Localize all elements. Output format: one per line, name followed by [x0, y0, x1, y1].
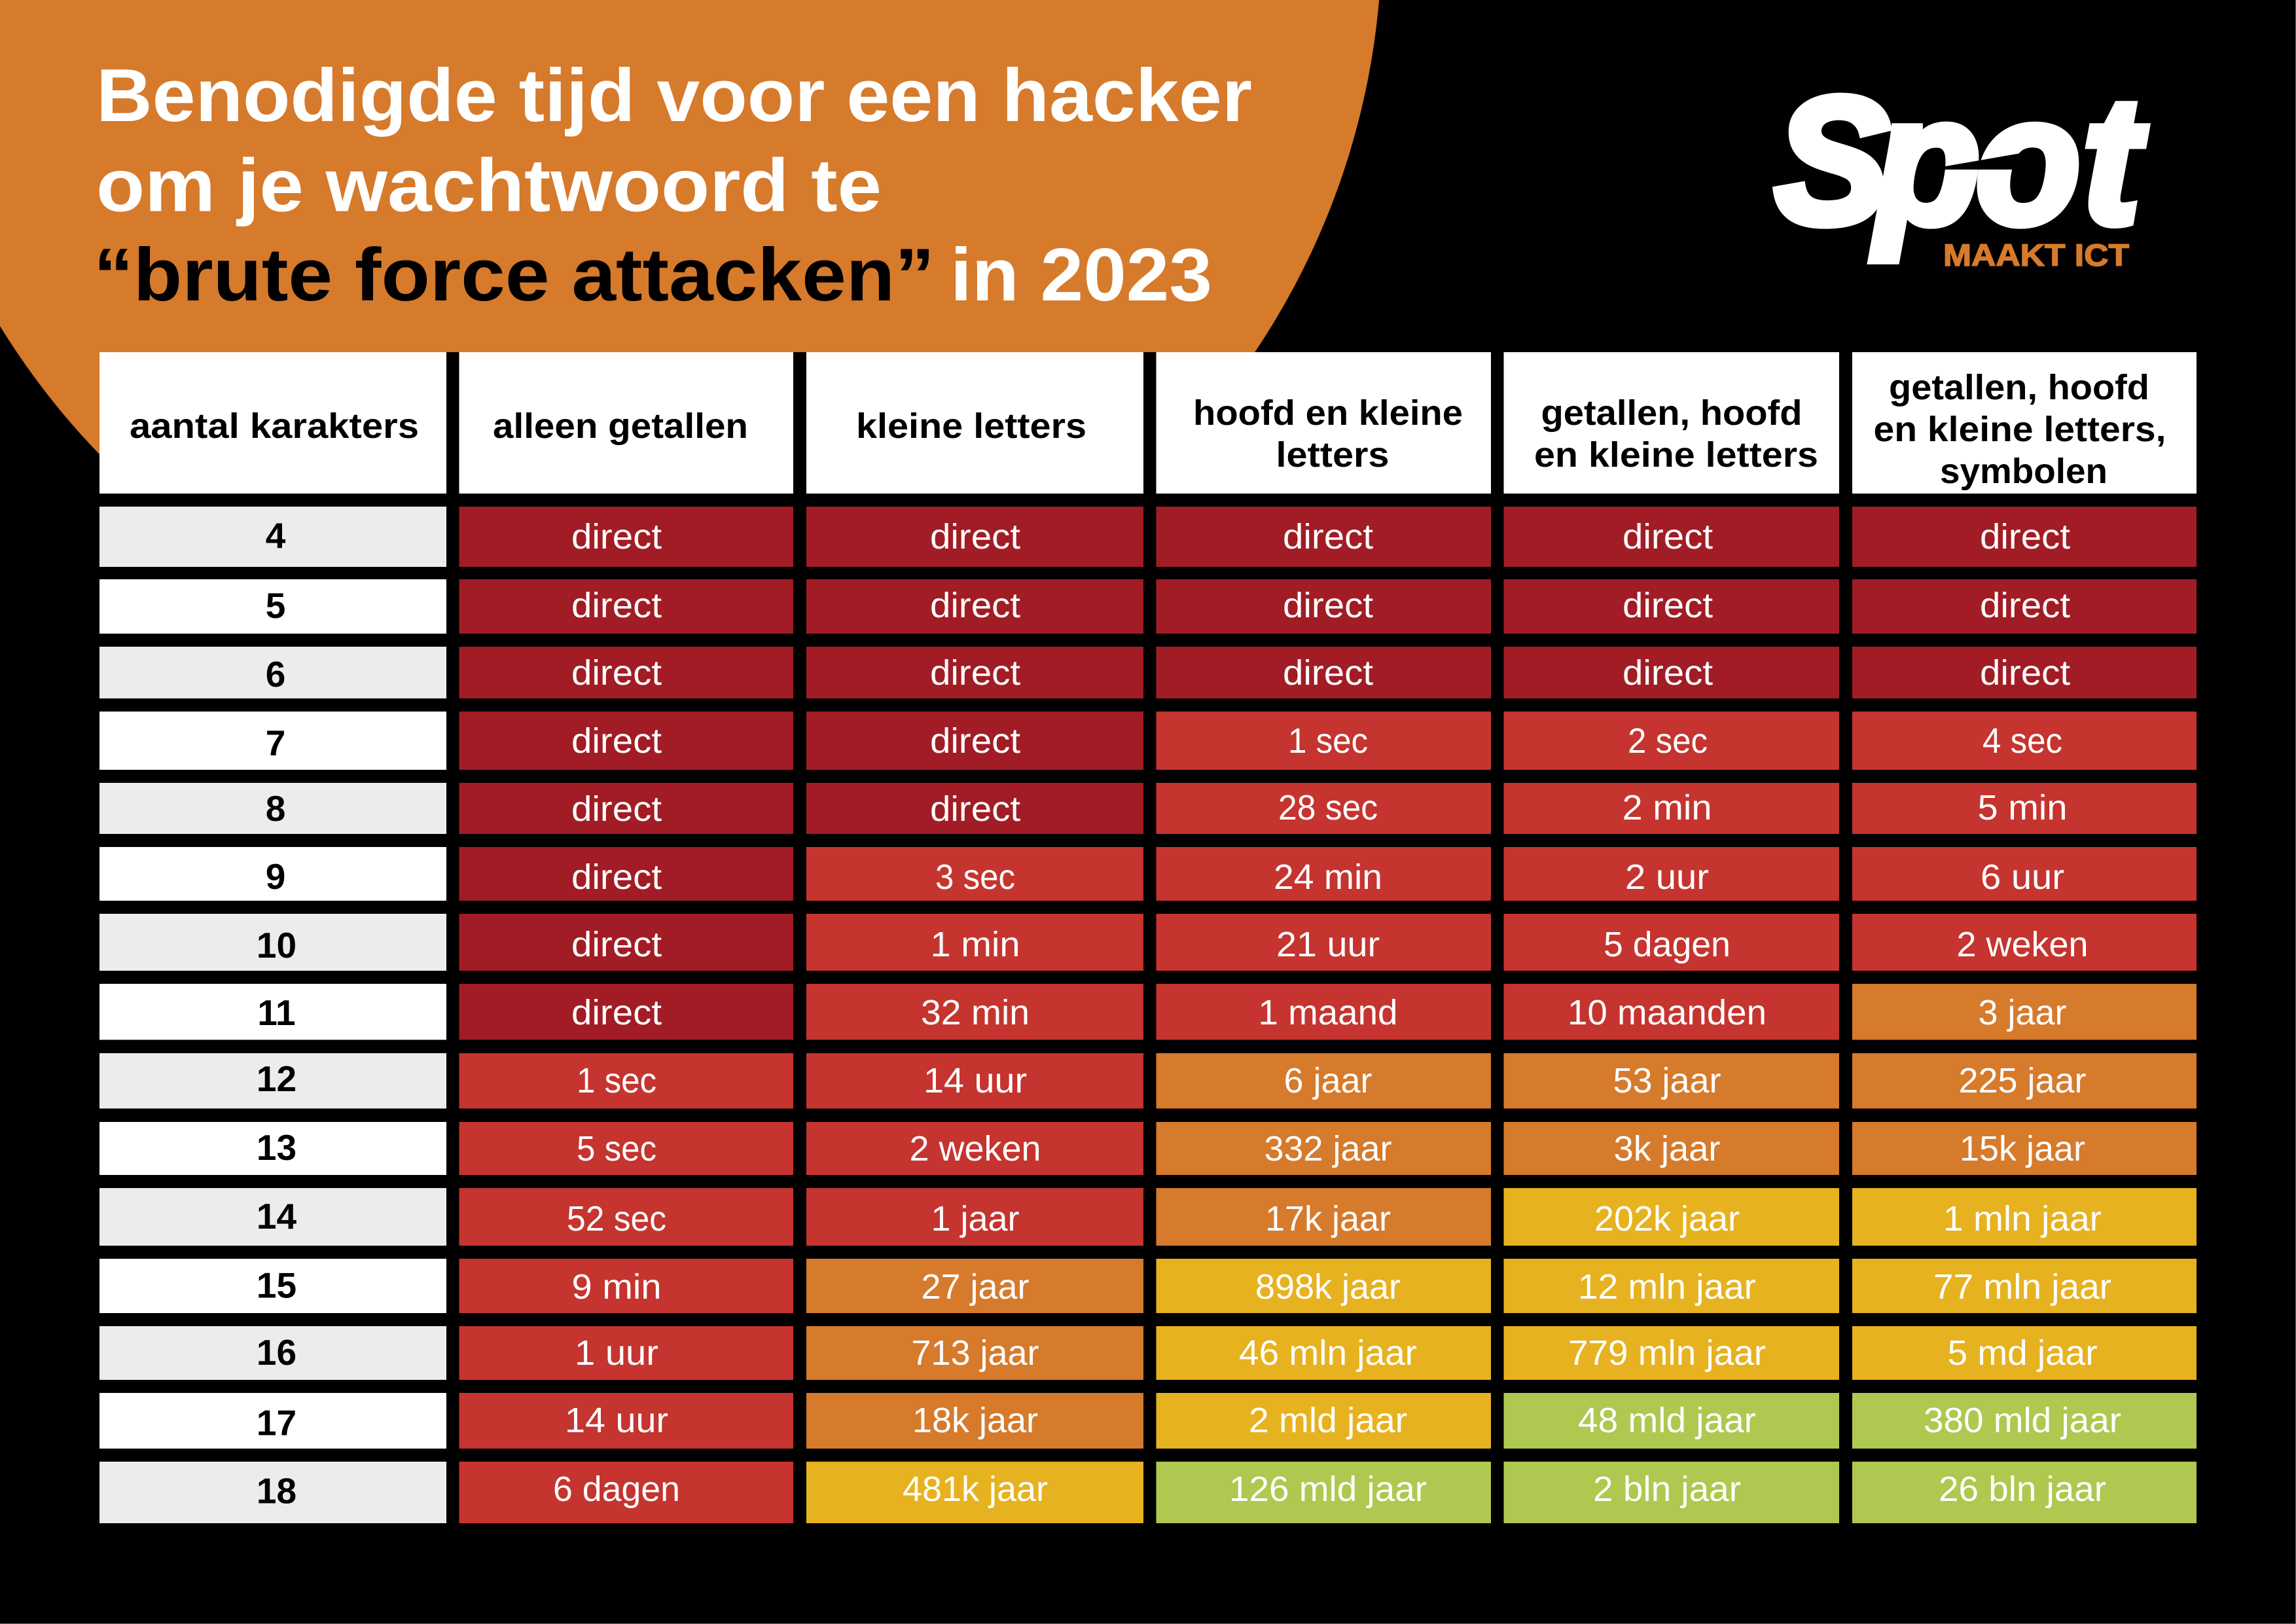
row: 4 karakters: direct — [1623, 518, 1713, 556]
row: 4 karakters: 4 — [266, 515, 286, 556]
row: 12 karakters: 6 jaar — [1284, 1062, 1372, 1100]
table header row: kleine letters — [856, 407, 1086, 446]
row: 9 karakters: 24 min — [1274, 858, 1382, 897]
row: 16 karakters: 1 uur — [575, 1334, 658, 1373]
row: 9 karakters — [99, 847, 2197, 901]
row: 18 karakters: 2 bln jaar — [1593, 1470, 1741, 1509]
row: 11 karakters: 32 min — [921, 994, 1030, 1032]
row: 11 karakters: 11 — [257, 992, 296, 1033]
row: 5 karakters: direct — [1623, 586, 1713, 625]
row: 14 karakters: 17k jaar — [1265, 1200, 1391, 1238]
row: 18 karakters: 126 mld jaar — [1229, 1470, 1427, 1509]
row: 18 karakters: 18 — [257, 1470, 296, 1511]
table header row: getallen, hoofd — [1889, 369, 2149, 407]
row: 18 karakters: 6 dagen — [553, 1470, 680, 1509]
row: 16 karakters — [99, 1326, 2197, 1380]
row: 15 karakters: 77 mln jaar — [1933, 1268, 2111, 1307]
row: 5 karakters: direct — [1980, 586, 2070, 625]
row: 4 karakters: direct — [571, 518, 662, 556]
table header row: en kleine letters — [1534, 436, 1818, 475]
row: 8 karakters: 5 min — [1978, 789, 2067, 827]
row: 8 karakters: 2 min — [1622, 789, 1712, 827]
row: 15 karakters — [99, 1259, 2197, 1313]
row: 7 karakters: direct — [571, 722, 662, 761]
row: 12 karakters: 1 sec — [577, 1062, 656, 1100]
row: 5 karakters: 5 — [266, 585, 285, 626]
row: 10 karakters — [99, 914, 2197, 971]
row: 5 karakters: direct — [1283, 586, 1373, 625]
logo: Spot maakt ICT: Spot — [1775, 60, 2147, 262]
row: 7 karakters: 2 sec — [1628, 722, 1708, 761]
row: 18 karakters — [99, 1462, 2197, 1523]
table header row: letters — [1276, 436, 1389, 475]
title: in 2023 — [950, 234, 1212, 317]
row: 11 karakters: 10 maanden — [1568, 994, 1767, 1032]
row: 4 karakters: direct — [1980, 518, 2070, 556]
row: 4 karakters: direct — [930, 518, 1020, 556]
title — [94, 54, 1252, 317]
row: 5 karakters: direct — [571, 586, 662, 625]
row: 11 karakters: direct — [571, 994, 662, 1032]
row: 8 karakters: 28 sec — [1278, 789, 1378, 827]
row: 13 karakters: 15k jaar — [1960, 1130, 2085, 1168]
row: 14 karakters — [99, 1188, 2197, 1246]
row: 13 karakters: 332 jaar — [1265, 1130, 1391, 1168]
row: 13 karakters — [99, 1122, 2197, 1175]
row: 8 karakters: direct — [571, 790, 662, 829]
table header row: alleen getallen — [493, 407, 748, 446]
row: 17 karakters: 48 mld jaar — [1578, 1401, 1756, 1440]
row: 7 karakters: 4 sec — [1982, 722, 2062, 761]
row: 6 karakters: direct — [1623, 654, 1713, 693]
row: 7 karakters: 7 — [266, 723, 285, 763]
row: 12 karakters: 12 — [257, 1058, 296, 1099]
row: 10 karakters: 5 dagen — [1604, 926, 1731, 964]
row: 5 karakters: direct — [930, 586, 1020, 625]
row: 12 karakters: 225 jaar — [1958, 1062, 2087, 1100]
table header row: hoofd en kleine — [1193, 394, 1463, 433]
title: “brute force attacken” — [94, 234, 935, 317]
row: 11 karakters: 3 jaar — [1978, 994, 2067, 1032]
row: 15 karakters: 898k jaar — [1255, 1268, 1401, 1307]
row: 17 karakters: 14 uur — [565, 1401, 668, 1440]
row: 16 karakters: 46 mln jaar — [1239, 1334, 1417, 1373]
row: 5 karakters — [99, 579, 2197, 634]
row: 4 karakters: direct — [1283, 518, 1373, 556]
row: 4 karakters — [99, 507, 2197, 567]
row: 7 karakters: direct — [930, 722, 1020, 761]
row: 6 karakters — [99, 647, 2197, 698]
row: 9 karakters: direct — [571, 858, 662, 897]
row: 6 karakters: 6 — [266, 654, 285, 695]
title: om je wachtwoord te — [96, 144, 882, 228]
row: 13 karakters: 13 — [257, 1127, 296, 1168]
row: 14 karakters: 52 sec — [567, 1200, 666, 1238]
row: 8 karakters: direct — [930, 790, 1020, 829]
row: 9 karakters: 6 uur — [1981, 858, 2064, 897]
row: 11 karakters — [99, 984, 2197, 1039]
row: 17 karakters: 380 mld jaar — [1924, 1401, 2121, 1440]
row: 16 karakters: 713 jaar — [911, 1334, 1039, 1373]
row: 15 karakters: 27 jaar — [922, 1268, 1029, 1307]
row: 8 karakters: 8 — [266, 788, 285, 829]
row: 18 karakters: 26 bln jaar — [1939, 1470, 2106, 1509]
logo: Spot maakt ICT: MAAKT ICT — [1943, 238, 2129, 272]
row: 9 karakters: 3 sec — [935, 858, 1015, 897]
row: 9 karakters: 2 uur — [1625, 858, 1709, 897]
row: 11 karakters: 1 maand — [1258, 994, 1398, 1032]
row: 14 karakters: 1 mln jaar — [1943, 1200, 2102, 1238]
row: 7 karakters — [99, 712, 2197, 770]
row: 10 karakters: 1 min — [931, 926, 1020, 964]
row: 17 karakters: 17 — [257, 1402, 296, 1443]
row: 13 karakters: 2 weken — [910, 1130, 1041, 1168]
row: 10 karakters: 2 weken — [1957, 926, 2088, 964]
row: 13 karakters: 3k jaar — [1614, 1130, 1720, 1168]
row: 10 karakters: 10 — [257, 925, 296, 965]
row: 16 karakters: 16 — [257, 1332, 296, 1373]
row: 12 karakters — [99, 1053, 2197, 1109]
row: 17 karakters: 2 mld jaar — [1249, 1401, 1407, 1440]
row: 14 karakters: 1 jaar — [931, 1200, 1020, 1238]
row: 12 karakters: 14 uur — [924, 1062, 1027, 1100]
row: 15 karakters: 9 min — [572, 1268, 661, 1307]
row: 14 karakters: 14 — [257, 1196, 296, 1236]
row: 9 karakters: 9 — [266, 856, 285, 897]
row: 15 karakters: 15 — [257, 1265, 296, 1305]
row: 12 karakters: 53 jaar — [1613, 1062, 1721, 1100]
row: 6 karakters: direct — [1283, 654, 1373, 693]
row: 10 karakters: direct — [571, 926, 662, 964]
row: 10 karakters: 21 uur — [1276, 926, 1380, 964]
row: 6 karakters: direct — [930, 654, 1020, 693]
row: 16 karakters: 779 mln jaar — [1568, 1334, 1766, 1373]
row: 16 karakters: 5 md jaar — [1948, 1334, 2097, 1373]
orange circle header background — [0, 0, 1382, 682]
table header row: symbolen — [1940, 452, 2108, 491]
table header row: en kleine letters, — [1873, 410, 2166, 449]
row: 8 karakters — [99, 783, 2197, 834]
row: 15 karakters: 12 mln jaar — [1578, 1268, 1756, 1307]
table header row: getallen, hoofd — [1541, 394, 1803, 433]
row: 14 karakters: 202k jaar — [1594, 1200, 1740, 1238]
table header row: aantal karakters — [130, 407, 419, 446]
row: 7 karakters: 1 sec — [1288, 722, 1368, 761]
row: 18 karakters: 481k jaar — [903, 1470, 1048, 1509]
row: 6 karakters: direct — [1980, 654, 2070, 693]
row: 13 karakters: 5 sec — [577, 1130, 656, 1168]
table header row — [99, 352, 2197, 494]
row: 17 karakters: 18k jaar — [912, 1401, 1038, 1440]
title: Benodigde tijd voor een hacker — [96, 54, 1252, 137]
row: 6 karakters: direct — [571, 654, 662, 693]
row: 17 karakters — [99, 1393, 2197, 1449]
